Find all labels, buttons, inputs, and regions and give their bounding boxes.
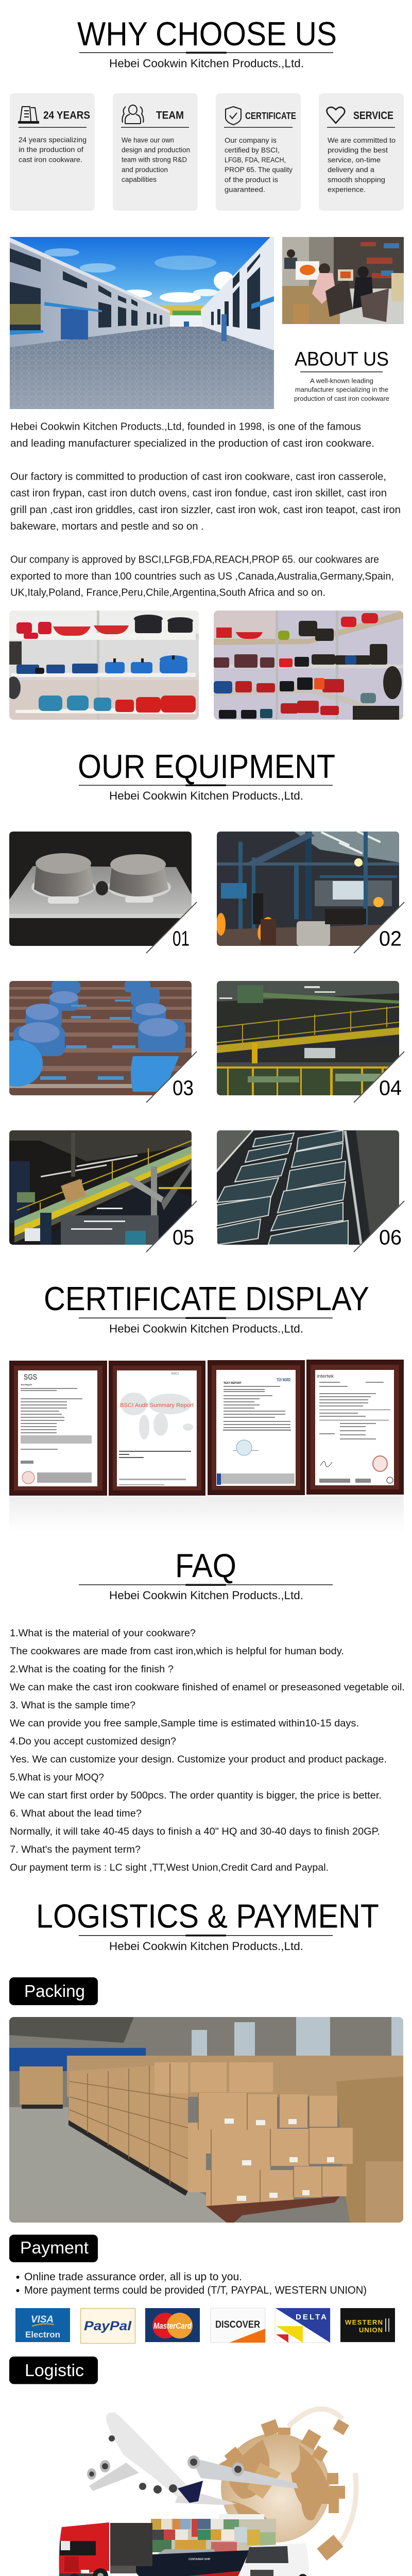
card text xyxy=(225,136,293,194)
card text: design and production xyxy=(122,145,190,154)
icon: delta xyxy=(275,2308,330,2343)
number: 05 xyxy=(173,1225,194,1249)
certificate: SGS: Test Report xyxy=(21,1383,32,1386)
number: 03 xyxy=(173,1076,194,1099)
card text: smooth shopping xyxy=(328,175,385,183)
subtitle: Hebei Cookwin Kitchen Products.,Ltd. xyxy=(109,1589,303,1602)
icon: mastercard xyxy=(145,2308,200,2342)
text block: FAQ questions and answers: Our payment term is : LC sight ,TT,West Union,Credit Card and Paypal. xyxy=(10,1862,329,1873)
equipment photo 06 xyxy=(217,1130,404,1252)
icon: western union: UNION xyxy=(359,2326,383,2334)
payment bullet list: More payment terms could be provided (T/T, PAYPAL, WESTERN UNION) xyxy=(24,2284,367,2296)
card heading: SERVICE xyxy=(353,110,393,122)
icon: visa electron: VISA xyxy=(31,2314,54,2325)
label: logistic xyxy=(9,2357,98,2384)
certificate: SGS xyxy=(9,1361,107,1496)
subtitle: Hebei Cookwin Kitchen Products.,Ltd. xyxy=(109,789,303,802)
card text: and production xyxy=(122,165,168,174)
section heading: logistics and payment xyxy=(36,1897,379,1953)
number: 02 xyxy=(379,926,402,950)
airplane xyxy=(87,2412,298,2505)
certificate: Intertek xyxy=(306,1360,404,1495)
card text: LFGB, FDA, REACH, xyxy=(225,156,286,164)
container ship: CONTAINER SHIP xyxy=(188,2558,211,2561)
card heading: CERTIFICATE xyxy=(245,110,296,121)
text block: company introduction: Our company is approved by BSCI,LFGB,FDA,REACH,PROP 65. our cookwares are xyxy=(10,554,379,566)
text block: FAQ questions and answers: 2.What is the coating for the finish ? xyxy=(10,1664,174,1675)
icon: western union xyxy=(340,2308,395,2342)
icon: western union: WESTERN xyxy=(345,2318,383,2326)
card text: in the production of xyxy=(19,145,83,154)
text block: FAQ questions and answers: The cookwares are made from cast iron,which is helpful for human body. xyxy=(10,1646,344,1657)
number: 04 xyxy=(379,1076,402,1099)
text block: company introduction: bakeware, mortars and pestle and so on . xyxy=(10,521,204,532)
title: CERTIFICATE DISPLAY xyxy=(44,1280,369,1317)
equipment photo 05 xyxy=(9,1130,197,1252)
logo text: SGS xyxy=(24,1373,37,1382)
icon: paypal xyxy=(80,2308,135,2343)
subtitle: Hebei Cookwin Kitchen Products.,Ltd. xyxy=(109,1940,303,1953)
icon: visa electron xyxy=(15,2308,70,2342)
card text: cast iron cookware. xyxy=(19,156,82,164)
title: WHY CHOOSE US xyxy=(77,15,337,53)
card text: 24 years specializing xyxy=(19,135,87,144)
label: packing: Packing xyxy=(24,1981,85,2001)
caption xyxy=(294,377,389,402)
icon: people xyxy=(122,105,144,124)
title: OUR EQUIPMENT xyxy=(78,748,335,785)
swirl trail xyxy=(288,2409,356,2555)
icon: heart xyxy=(327,107,345,123)
photo: factory courtyard xyxy=(10,237,274,409)
text block: FAQ questions and answers: 4.Do you accept customized design? xyxy=(10,1736,176,1747)
logo text: TÜV NORD xyxy=(277,1378,290,1382)
card text xyxy=(328,136,396,194)
section heading: FAQ xyxy=(79,1547,333,1602)
card text: team with strong R&D xyxy=(122,156,187,164)
card text: PROP 65. The quality xyxy=(225,165,293,174)
photo: showroom shelves left xyxy=(6,611,199,720)
equipment photo 03 xyxy=(0,981,197,1103)
about us block xyxy=(294,348,389,402)
text block: FAQ questions and answers: 6. What about the lead time? xyxy=(10,1808,142,1819)
text block: FAQ questions and answers: We can start first order by 500pcs. The order quantity is bigger, the price is better. xyxy=(10,1790,382,1801)
certificates reflection xyxy=(9,1496,404,1532)
card text: guaranteed. xyxy=(225,185,265,194)
card text: experience. xyxy=(328,185,366,194)
number: 06 xyxy=(379,1225,402,1249)
caption: manufacturer specializing in the xyxy=(295,385,388,394)
icon: shield check xyxy=(226,107,241,125)
text block: company introduction xyxy=(10,421,401,599)
icon: visa electron: Electron xyxy=(25,2330,60,2340)
equipment photo 02 xyxy=(216,831,404,953)
number: 01 xyxy=(173,926,190,950)
text block: company introduction: exported to more than 100 countries such as US ,Canada,Australia,Germany,Spain, xyxy=(10,571,394,582)
card text: We are committed to xyxy=(328,136,396,144)
panel: certificate xyxy=(216,93,301,211)
label: logistic: Logistic xyxy=(25,2361,84,2380)
text block: FAQ questions and answers: We can provide you free sample,Sample time is estimated within10-15 days. xyxy=(10,1718,359,1729)
section heading: certificate display xyxy=(44,1280,369,1335)
subtitle: Hebei Cookwin Kitchen Products.,Ltd. xyxy=(109,1322,303,1335)
icon: paypal: PayPal xyxy=(84,2319,132,2333)
text block: FAQ questions and answers: Normally, it will take 40-45 days to finish a 40" HQ and 30-40 days to finish 20GP. xyxy=(10,1826,380,1837)
text block: company introduction: and leading manufacturer specialized in the production of cast iron cookware. xyxy=(10,438,374,449)
text block: FAQ questions and answers: 3. What is the sample time? xyxy=(10,1700,135,1711)
text block: FAQ questions and answers: 5.What is your MOQ? xyxy=(10,1772,104,1783)
title: FAQ xyxy=(175,1547,236,1584)
certificate: TUV xyxy=(208,1360,305,1495)
card text: Our company is xyxy=(225,136,277,144)
caption: A well-known leading xyxy=(310,377,373,384)
text block: FAQ questions and answers: We can make the cast iron cookware finished of enamel or preseasoned vegetable oil. xyxy=(10,1682,405,1693)
certificate: BSCI xyxy=(109,1361,205,1496)
label: payment: Payment xyxy=(20,2238,89,2257)
label: payment xyxy=(9,2235,98,2262)
card text: providing the best xyxy=(328,146,388,154)
card text: We have our own xyxy=(122,136,174,144)
photo: packed cartons in warehouse xyxy=(9,2017,403,2223)
world map xyxy=(121,1393,193,1439)
card text: delivery and a xyxy=(328,165,374,174)
text block: company introduction: Hebei Cookwin Kitchen Products.,Ltd, founded in 1998, is one of the famous xyxy=(10,421,361,433)
photo: showroom shelves right xyxy=(214,611,403,720)
panel: service xyxy=(319,93,404,211)
card heading: 24 YEARS xyxy=(43,109,90,122)
payment bullet list xyxy=(16,2271,367,2296)
equipment photo 01 xyxy=(9,832,197,953)
caption: production of cast iron cookware xyxy=(294,395,389,402)
container ship xyxy=(129,2514,276,2576)
illustration: global logistics xyxy=(59,2409,356,2576)
photo: sales office xyxy=(282,237,404,324)
globe with parcels xyxy=(219,2419,349,2561)
icon: mastercard: MasterCard xyxy=(153,2321,192,2331)
card text: certified by BSCI, xyxy=(225,146,280,154)
payment bullet list: Online trade assurance order, all is up to you. xyxy=(24,2271,242,2283)
icon: discover xyxy=(211,2308,265,2343)
card text xyxy=(19,135,87,164)
card text xyxy=(122,136,190,183)
certificate: TUV: TEST REPORT xyxy=(224,1382,242,1385)
section heading: our equipment xyxy=(78,748,335,802)
text block: company introduction: grill pan ,cast iron griddles, cast iron sizzler, cast iron wok, cast iron teapot, cast iron xyxy=(10,504,401,516)
text block: FAQ questions and answers: 1.What is the material of your cookware? xyxy=(10,1628,196,1639)
text block: company introduction: UK,Italy,Poland, France,Peru,Chile,Argentina,South Africa and so on. xyxy=(10,587,325,599)
red truck xyxy=(59,2522,152,2576)
report title: BSCI Audit Summary Report xyxy=(120,1402,194,1409)
icon: delta: DELTA xyxy=(296,2313,327,2321)
heading: ABOUT US xyxy=(295,348,389,370)
text block: company introduction: Our factory is committed to production of cast iron cookware, cast iron casserole, xyxy=(10,471,386,482)
text block: company introduction: cast iron frypan, cast iron dutch ovens, cast iron fondue, cast iron skillet, cast iron xyxy=(10,487,387,499)
card text: service, on-time xyxy=(328,156,381,164)
card text: capabilities xyxy=(122,175,157,183)
certificate: BSCI: BSCI xyxy=(171,1372,179,1376)
subtitle: Hebei Cookwin Kitchen Products.,Ltd. xyxy=(109,57,304,70)
text block: FAQ questions and answers: Yes. We can customize your design. Customize your product and product package. xyxy=(10,1754,387,1765)
text block: FAQ questions and answers: 7. What's the payment term? xyxy=(10,1844,141,1855)
label: packing xyxy=(9,1977,98,2005)
icon: building xyxy=(19,107,39,123)
section heading: why choose us xyxy=(77,15,337,70)
equipment photo 04 xyxy=(217,981,404,1103)
icon: discover: DISCOVER xyxy=(215,2319,260,2330)
panel: 24 years xyxy=(10,93,95,211)
card heading: TEAM xyxy=(156,109,184,122)
white van xyxy=(241,2543,309,2576)
text block: FAQ questions and answers xyxy=(10,1628,405,1873)
logo text: intertek xyxy=(317,1374,334,1379)
title: LOGISTICS & PAYMENT xyxy=(36,1897,379,1935)
card text: of the product is xyxy=(225,175,278,183)
panel: team xyxy=(113,93,198,211)
